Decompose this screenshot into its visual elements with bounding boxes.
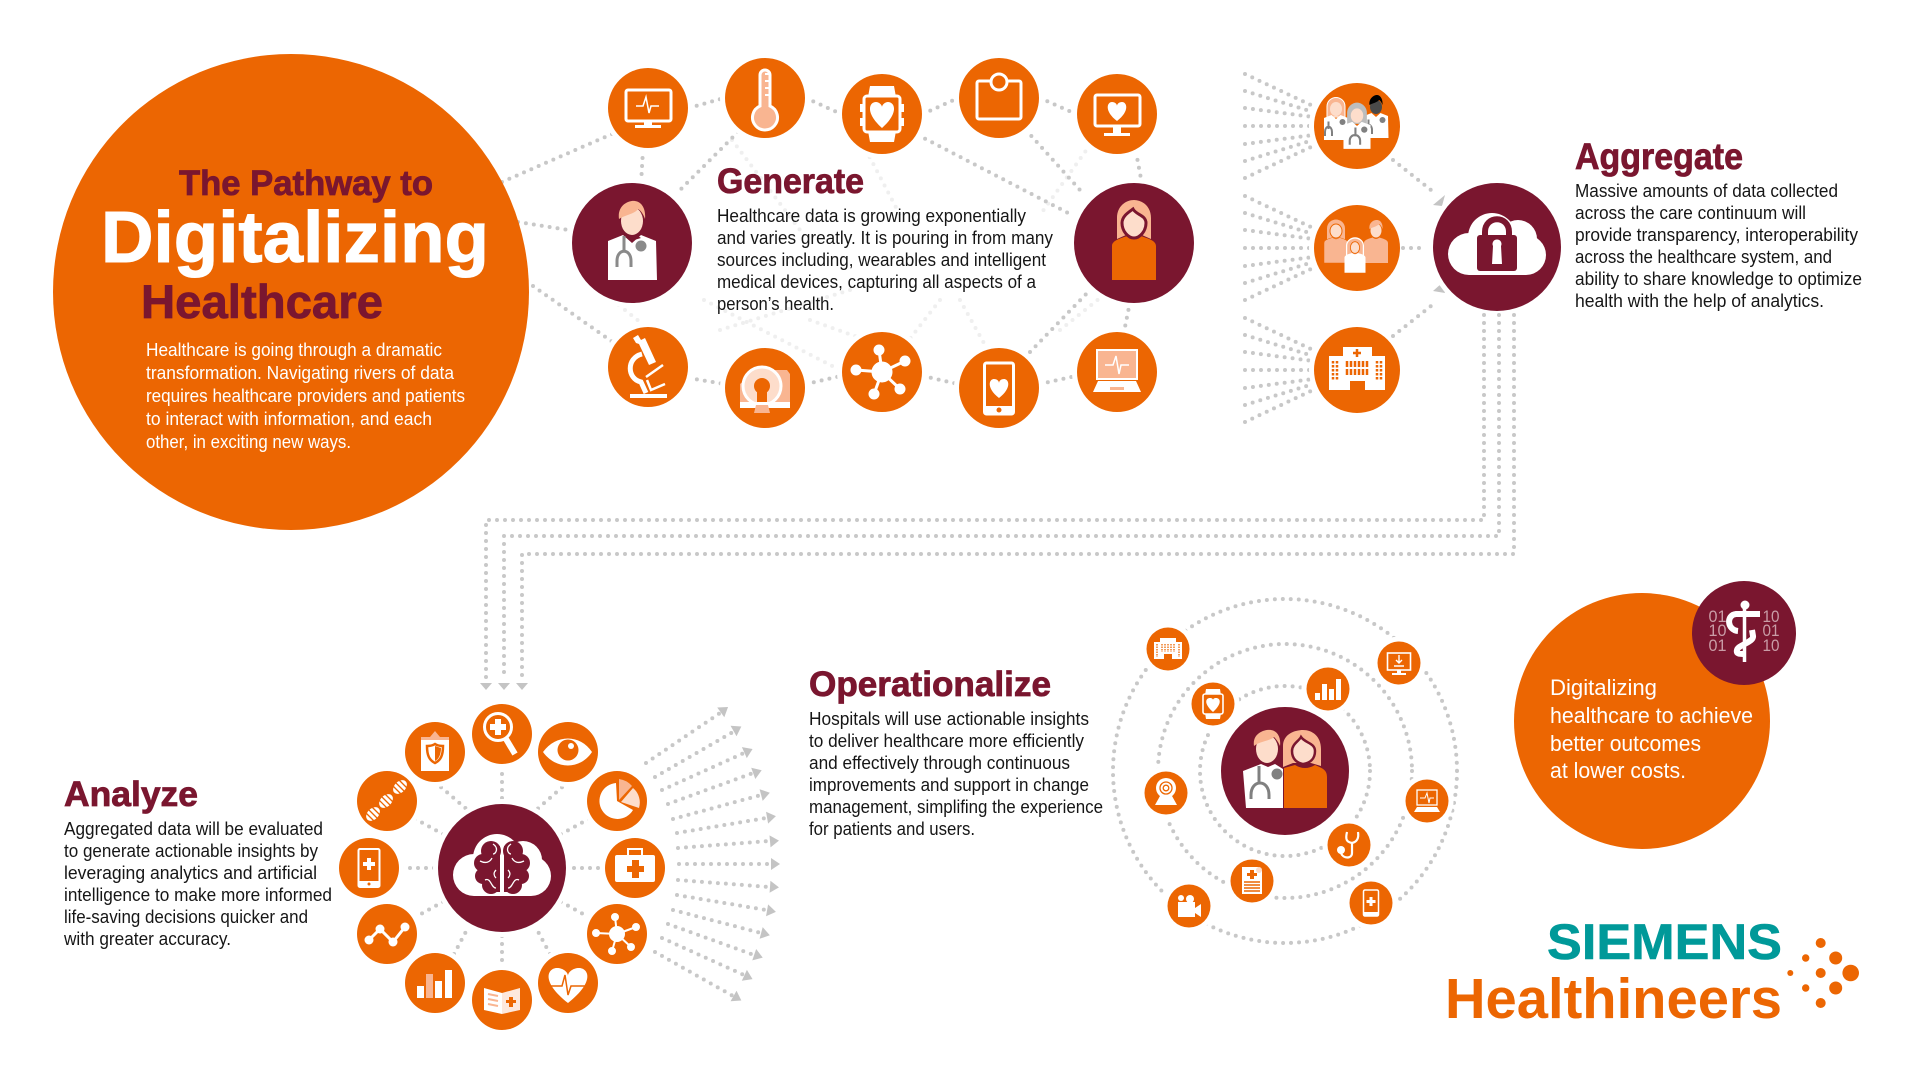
icon: doctor and patient — [1221, 707, 1349, 835]
logo dots — [1787, 938, 1859, 1008]
icon: heart pulse — [538, 953, 598, 1013]
icon: doctor — [572, 183, 692, 303]
text block: Generate: sources including, wearables and intelligent — [717, 250, 1046, 270]
icon: watch small — [1192, 682, 1234, 726]
conclusion text: at lower costs. — [1550, 758, 1686, 783]
text block: Operationalize: for patients and users. — [809, 819, 975, 839]
icon: digital rod of Asclepius: 01 — [1708, 607, 1726, 626]
heading: Operationalize: Operationalize — [809, 665, 1051, 704]
text block: Aggregate: health with the help of analytics. — [1575, 291, 1824, 311]
icon: phone health — [339, 838, 399, 898]
text block: Operationalize: to deliver healthcare more efficiently — [809, 731, 1084, 751]
conclusion text: healthcare to achieve — [1550, 703, 1753, 728]
icon: vital signs monitor — [608, 68, 688, 148]
conclusion text — [1550, 675, 1753, 783]
text block: Analyze: life-saving decisions quicker and — [64, 907, 308, 927]
logo: Siemens Healthineers — [1445, 914, 1859, 1031]
icon: medical document — [1230, 860, 1274, 902]
conclusion text: better outcomes — [1550, 731, 1701, 756]
icon: heart monitor — [1077, 74, 1157, 154]
text block: Aggregate: Massive amounts of data collected — [1575, 181, 1838, 201]
text block: Generate: person’s health. — [717, 294, 834, 314]
text block: Aggregate: across the healthcare system, and — [1575, 247, 1832, 267]
data fan lines into aggregate sources — [1245, 74, 1313, 422]
logo: Siemens Healthineers: Healthineers — [1445, 967, 1782, 1031]
introduction text: requires healthcare providers and patients — [146, 385, 465, 406]
panel: conclusion circle — [1514, 581, 1796, 849]
heading: Analyze: Analyze — [64, 775, 198, 814]
icon: digital rod of Asclepius: 01 — [1762, 621, 1780, 640]
arrows: insights radiating — [646, 702, 780, 1006]
icon: clipboard shield — [405, 722, 465, 782]
icon: digital rod of Asclepius: 10 — [1708, 621, 1726, 640]
icon: care team — [1314, 83, 1400, 169]
icon: download monitor — [1378, 642, 1420, 684]
text block: Generate: and varies greatly. It is pouring in from many — [717, 228, 1053, 248]
icon: DNA — [357, 771, 417, 831]
heading: Aggregate: Aggregate — [1575, 136, 1743, 177]
icon: bars small — [1306, 668, 1350, 710]
arrows: aggregate to analyze — [480, 315, 1514, 690]
icon: stethoscope — [1328, 824, 1370, 866]
icon: phone small — [1350, 882, 1392, 924]
text block: Operationalize: improvements and support in change — [809, 775, 1089, 795]
icon: pie chart — [587, 771, 647, 831]
icon: digital rod of Asclepius: 10 — [1762, 607, 1780, 626]
panel: analyze wheel — [339, 704, 665, 1030]
icon: secure data cloud — [1433, 183, 1561, 311]
icon: microscope — [608, 327, 688, 407]
icon: bar chart — [405, 953, 465, 1013]
text block: Aggregate: provide transparency, interoperability — [1575, 225, 1858, 245]
text block: Analyze: intelligence to make more informed — [64, 885, 332, 905]
orbit rings — [1113, 599, 1457, 943]
icon: search health — [472, 704, 532, 764]
introduction text: to interact with information, and each — [146, 408, 432, 429]
text block: Analyze: Aggregated data will be evaluated — [64, 819, 323, 839]
icon: digital rod of Asclepius: 01 — [1708, 636, 1726, 655]
text block: Analyze: to generate actionable insights by — [64, 841, 318, 861]
text block: Aggregate — [1575, 181, 1862, 311]
text block: Analyze: leveraging analytics and artificial — [64, 863, 317, 883]
icon: weighing scale — [959, 58, 1039, 138]
icon: digital rod of Asclepius: 10 — [1762, 636, 1780, 655]
text block: Aggregate: across the care continuum will — [1575, 203, 1806, 223]
icon: MRI scanner — [725, 348, 805, 428]
title line: Digitalizing: Digitalizing — [101, 198, 489, 278]
icon: network hub — [842, 332, 922, 412]
text block: Generate: medical devices, capturing all aspects of a — [717, 272, 1037, 292]
icon: smart watch — [842, 74, 922, 154]
icon: eye — [538, 722, 598, 782]
network connection lines — [502, 98, 1142, 384]
text block: Generate: Healthcare data is growing exponentially — [717, 206, 1026, 226]
icon: medical book — [472, 970, 532, 1030]
text block: Operationalize — [809, 709, 1103, 839]
icon: line graph — [357, 904, 417, 964]
text block: Aggregate: ability to share knowledge to optimize — [1575, 269, 1862, 289]
icon: patient family — [1314, 205, 1400, 291]
icon: webcam — [1144, 772, 1188, 814]
title line: Healthcare: Healthcare — [141, 275, 383, 328]
icon: thermometer — [725, 58, 805, 138]
icon: laptop — [1077, 332, 1157, 412]
panel: generate icons — [572, 58, 1194, 428]
icon: network hub small — [587, 904, 647, 964]
text block: Operationalize: management, simplifing the experience — [809, 797, 1103, 817]
conclusion text: Digitalizing — [1550, 675, 1657, 700]
icon: brain in cloud — [438, 804, 566, 932]
text block: Operationalize: and effectively through continuous — [809, 753, 1070, 773]
text block: Analyze — [63, 819, 332, 949]
icon: medical kit — [605, 838, 665, 898]
icon: smartphone heart — [959, 348, 1039, 428]
icon: hospital small — [1146, 628, 1190, 670]
text block: Operationalize: Hospitals will use actionable insights — [809, 709, 1089, 729]
panel: aggregate sources — [1314, 83, 1400, 413]
text block: Analyze: with greater accuracy. — [63, 929, 231, 949]
icon: hospital — [1314, 327, 1400, 413]
panel: operationalize orbit — [1113, 599, 1457, 943]
introduction text: other, in exciting new ways. — [146, 431, 351, 452]
icon: laptop small — [1406, 780, 1448, 822]
logo: Siemens Healthineers: SIEMENS — [1547, 914, 1782, 970]
text block: Generate — [717, 206, 1053, 314]
icon: patient — [1074, 183, 1194, 303]
icon: digital rod of Asclepius — [1692, 581, 1796, 685]
arrows into data cloud — [1393, 160, 1445, 336]
introduction text: Healthcare is going through a dramatic — [146, 339, 442, 360]
introduction text — [146, 339, 465, 452]
panel: introduction circle — [53, 54, 529, 530]
title line: The Pathway to: The Pathway to — [179, 164, 433, 203]
icon: video camera — [1168, 884, 1210, 928]
spokes — [402, 766, 602, 968]
heading: Generate: Generate — [717, 162, 864, 201]
introduction text: transformation. Navigating rivers of data — [146, 362, 455, 383]
